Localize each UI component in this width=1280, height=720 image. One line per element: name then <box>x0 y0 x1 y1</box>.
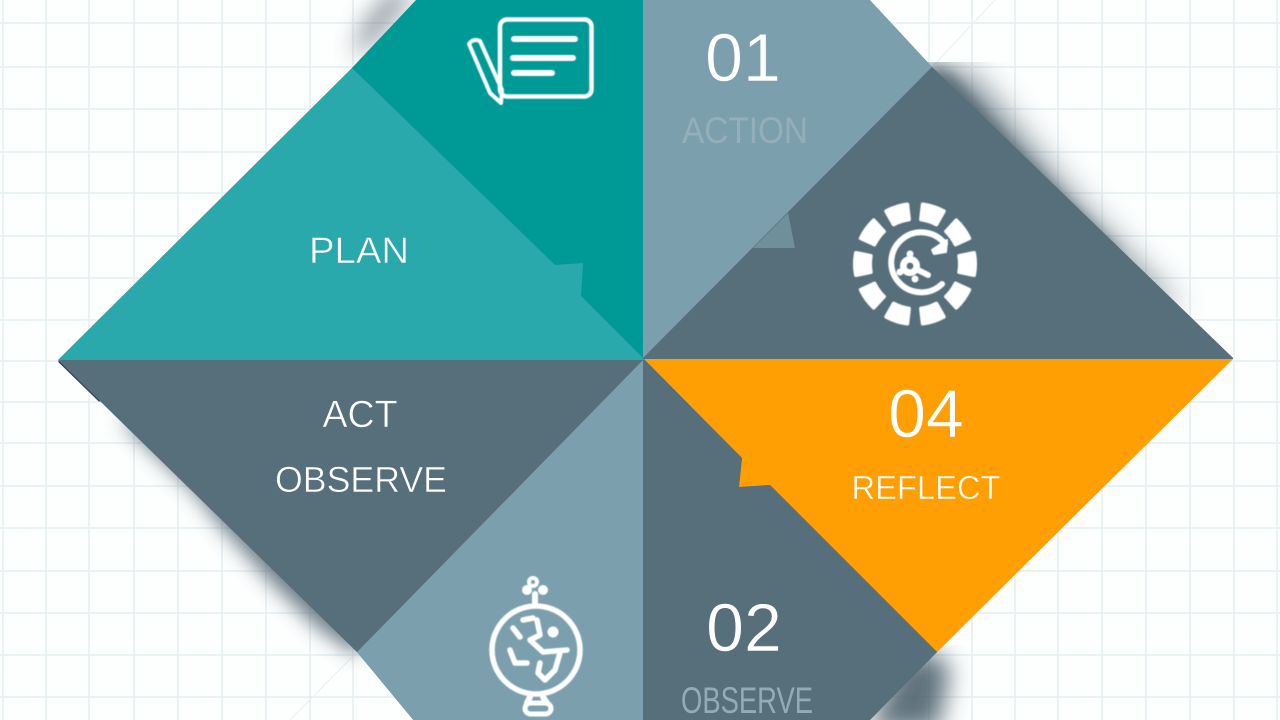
panel: step 01 wedge <box>643 0 932 360</box>
heading: plan: PLAN <box>309 230 409 271</box>
panel: observe icon wedge <box>357 360 643 720</box>
panel: reflect icon wedge <box>643 67 1233 359</box>
number: 04: 04 <box>888 376 964 452</box>
panel: plan wedge <box>58 68 643 360</box>
number: 01: 01 <box>705 20 781 96</box>
panel: plan icon wedge <box>352 0 644 360</box>
icon: document and pencil <box>469 20 592 103</box>
icon: globe <box>492 578 580 714</box>
faint label: observe: OBSERVE <box>681 680 813 720</box>
number: 02: 02 <box>706 590 782 666</box>
panel: act and observe wedge <box>58 360 643 652</box>
panel: step 02 wedge <box>643 360 937 720</box>
icon: gear cycle <box>855 204 975 324</box>
heading: act: ACT <box>322 394 398 436</box>
faint label: step 01: ACTION <box>682 110 808 151</box>
heading: observe: OBSERVE <box>275 459 447 500</box>
heading: reflect: REFLECT <box>852 469 1000 506</box>
panel: reflect wedge <box>644 359 1233 652</box>
